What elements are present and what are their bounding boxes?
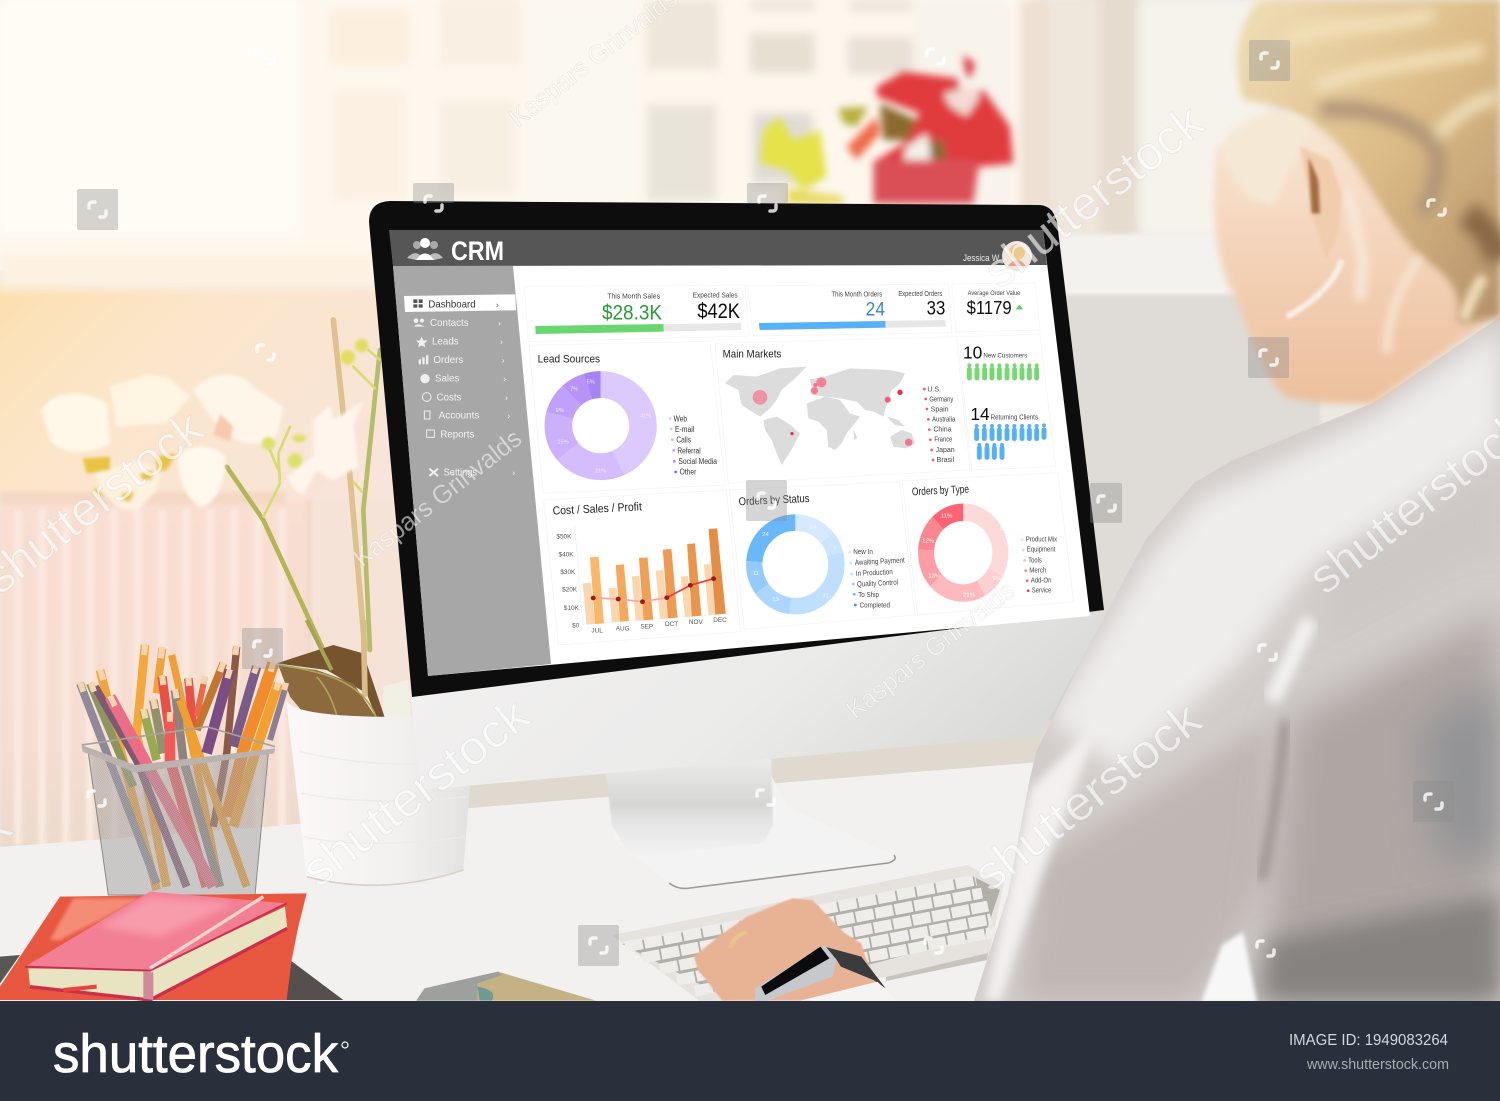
panel: lead sources: 41%	[640, 413, 651, 419]
y axis labels: $40K	[559, 552, 574, 558]
KPI panel: orders: 24	[866, 299, 885, 320]
y axis labels: $30K	[560, 569, 576, 576]
panel: lead sources: Web	[674, 414, 687, 423]
panel: orders by type: Product Mix	[1026, 535, 1057, 543]
watermark: photographer name: Kaspars Grinvalds	[347, 423, 527, 573]
panel: lead sources: 7%	[570, 387, 578, 393]
neck strands	[1347, 187, 1483, 353]
panel: lead sources: 9%	[556, 408, 564, 414]
header bar: CRM	[451, 236, 504, 266]
chart: status donut	[754, 523, 836, 606]
panel: lead sources: 5%	[587, 379, 595, 385]
pencil holder mesh	[82, 727, 275, 895]
panel: orders by status: Orders by Status	[738, 492, 810, 508]
sidebar menu: ›	[505, 392, 508, 402]
panel: customers	[957, 334, 1056, 470]
sidebar menu	[404, 294, 516, 478]
sidebar menu: ›	[507, 411, 510, 421]
panel: orders by type: Service	[1032, 586, 1051, 595]
footer url: www.shutterstock.com	[1306, 1057, 1449, 1073]
header bar: Jessica W.	[963, 253, 1001, 263]
y axis labels: $50K	[556, 534, 572, 541]
band of wall under monitor	[420, 720, 1060, 820]
face and neck	[1214, 100, 1500, 403]
panel: main markets: Brasil	[937, 457, 955, 464]
panel: main markets: China	[933, 427, 952, 434]
panel: orders by status: To Ship	[858, 590, 879, 599]
panel: main markets: Spain	[931, 406, 949, 413]
panel: orders by status: New In	[853, 547, 873, 556]
panel: orders by type: Add-On	[1031, 576, 1051, 584]
panel: orders by type	[902, 473, 1074, 615]
sidebar menu: Leads	[432, 336, 459, 347]
sidebar menu: Contacts	[430, 318, 469, 329]
woman's head and hair	[1210, 0, 1500, 403]
sidebar menu: Settings	[444, 467, 477, 478]
watermark: shutterstock wordmarks: shutterstock	[974, 95, 1214, 299]
sidebar menu: ›	[496, 299, 499, 309]
x axis labels: OCT	[665, 621, 678, 628]
orchid stems and stick	[227, 320, 380, 650]
sidebar menu: Sales	[435, 374, 459, 385]
panel: lead sources: Lead Sources	[538, 354, 600, 366]
KPI panel: orders: This Month Orders	[831, 292, 883, 299]
KPI panel: sales: Expected Sales	[693, 291, 738, 300]
pencils in holder	[80, 644, 287, 890]
panel: orders by status: 13	[772, 597, 779, 603]
red poinsettia in red pot	[847, 55, 1013, 203]
sidebar menu: Dashboard	[428, 299, 476, 310]
panel: main markets	[715, 337, 970, 483]
CRM screen	[389, 230, 1090, 676]
panel: main markets: Germany	[929, 396, 954, 403]
KPI panel: average order value: $1179	[967, 297, 1012, 318]
x axis labels: AUG	[616, 626, 630, 632]
panel: orders by status: 14	[809, 524, 817, 530]
panel: orders by status: Quality Control	[857, 578, 898, 589]
KPI panel: sales: $42K	[697, 299, 740, 323]
radiator	[0, 492, 420, 856]
panel: orders by type: 13%	[928, 573, 940, 579]
x axis labels: SEP	[640, 624, 653, 630]
KPI panel: orders: Expected Orders	[898, 291, 943, 298]
sidebar menu: ›	[500, 336, 503, 346]
panel: orders by type: Orders by Type	[912, 484, 969, 498]
panel: cost sales profit	[544, 490, 741, 645]
KPI panel: sales: This Month Sales	[607, 292, 660, 301]
KPI panel: sales	[524, 285, 749, 342]
KPI panel: average order value	[952, 283, 1040, 332]
sidebar menu: Accounts	[439, 411, 479, 422]
panel: customers: 10	[963, 342, 982, 362]
window panes and frame	[0, 0, 1050, 288]
panel: lead sources: 21%	[595, 468, 606, 474]
watermark: photographer name: Kaspars Grinvalds	[840, 575, 1020, 725]
sidebar menu: ›	[509, 429, 512, 439]
panel: orders by status	[729, 482, 915, 629]
sidebar menu: Reports	[440, 429, 474, 440]
panel: main markets: France	[934, 437, 952, 444]
orchid petals and buds	[42, 339, 368, 512]
footer bar	[0, 1001, 1500, 1101]
panel: main markets: Main Markets	[723, 348, 782, 360]
mask strap	[1287, 260, 1342, 317]
panel: lead sources: 15%	[557, 439, 569, 445]
sidebar menu: ›	[503, 374, 506, 384]
chart: type donut	[926, 512, 1000, 593]
woman's hand and smartwatch	[694, 898, 896, 1001]
desk surface	[0, 762, 1040, 1001]
y axis labels: $0	[572, 623, 580, 629]
watermark: shutterstock wordmarks: shutterstock	[292, 688, 540, 898]
panel: orders by type: 33%	[1000, 526, 1012, 532]
panel: orders by status: Completed	[860, 601, 890, 609]
watermark: shutterstock wordmarks: shutterstock	[964, 692, 1212, 902]
panel: customers: 14	[970, 404, 990, 424]
header bar	[389, 230, 1047, 271]
panel: main markets: Japan	[936, 447, 955, 454]
watermark: grey icon squares	[77, 40, 1454, 966]
panel: orders by status: 31	[822, 594, 829, 600]
sidebar menu: ›	[502, 355, 505, 365]
x axis labels	[591, 617, 727, 634]
y axis labels	[556, 534, 580, 629]
footer logo: shutterstock	[53, 1024, 339, 1084]
KPI panel: sales: $28.3K	[602, 300, 662, 324]
profit line	[593, 598, 667, 602]
screen white area	[390, 230, 1090, 676]
panel: orders by type: 12%	[922, 539, 934, 545]
books stack	[0, 892, 343, 1000]
x axis labels: JUL	[591, 628, 603, 634]
panel: customers: New Customers	[983, 352, 1028, 359]
panel: orders by status: Awaiting Payment	[855, 556, 906, 567]
keyboard	[612, 865, 1004, 1001]
panel: orders by type: Equipment	[1027, 545, 1056, 554]
hair	[1237, 0, 1500, 323]
world map	[725, 367, 915, 465]
footer registered mark	[342, 1042, 348, 1048]
hair highlights	[1287, 13, 1500, 260]
sidebar menu: Costs	[437, 392, 461, 403]
panel: lead sources: Social Media	[678, 457, 717, 466]
sidebar menu: Orders	[433, 355, 463, 366]
sidebar menu: ›	[498, 318, 501, 328]
panel: lead sources: E-mail	[675, 425, 695, 434]
x axis labels: NOV	[689, 619, 704, 626]
panel: orders by type: 21%	[963, 593, 975, 599]
yellow flower behind monitor	[760, 107, 868, 203]
y axis labels: $20K	[562, 587, 578, 594]
sidebar menu: ›	[512, 467, 515, 477]
panel: customers: Returning Clients	[991, 414, 1038, 421]
panel: orders by status: 7	[833, 546, 836, 552]
chart: lead sources donut	[558, 385, 643, 467]
monitor chin	[410, 612, 1103, 790]
panel: orders by type: 11%	[941, 513, 952, 519]
panel: lead sources	[529, 341, 725, 493]
watermark: small bracket icons	[88, 49, 1445, 956]
white flower pot with leaves	[277, 620, 470, 885]
bars	[583, 583, 595, 625]
y axis labels: $10K	[564, 605, 580, 612]
panel: lead sources: Calls	[676, 436, 691, 445]
monitor bezel	[369, 201, 1104, 697]
footer image id: IMAGE ID: 1949083264	[1289, 1032, 1448, 1049]
woman's blouse	[960, 300, 1500, 1003]
panel: orders by type: 9%	[992, 576, 1001, 582]
panel: orders by type: Merch	[1029, 566, 1046, 574]
panel: lead sources: Referral	[677, 446, 701, 455]
KPI panel: orders: 33	[927, 299, 945, 320]
x axis labels: DEC	[713, 617, 727, 624]
ear	[1300, 147, 1342, 260]
KPI panel: average order value: Average Order Value	[968, 290, 1021, 297]
panel: main markets: Australia	[932, 417, 955, 424]
panel: cost sales profit: Cost / Sales / Profit	[552, 500, 643, 518]
sidebar	[393, 266, 551, 676]
monitor stand	[606, 753, 895, 888]
panel: orders by type: Tools	[1028, 556, 1042, 564]
panel: main markets: U.S.	[927, 386, 941, 393]
watermark: photographer name	[347, 0, 1020, 725]
panel: orders by status: 11	[753, 571, 759, 577]
panel: lead sources: Other	[680, 468, 697, 477]
sideburn hair	[1223, 112, 1313, 207]
panel: orders by status: 24	[762, 532, 770, 538]
panel: orders by status: In Production	[856, 567, 893, 578]
phone on desk	[416, 972, 596, 1001]
KPI panel: orders	[747, 284, 952, 336]
